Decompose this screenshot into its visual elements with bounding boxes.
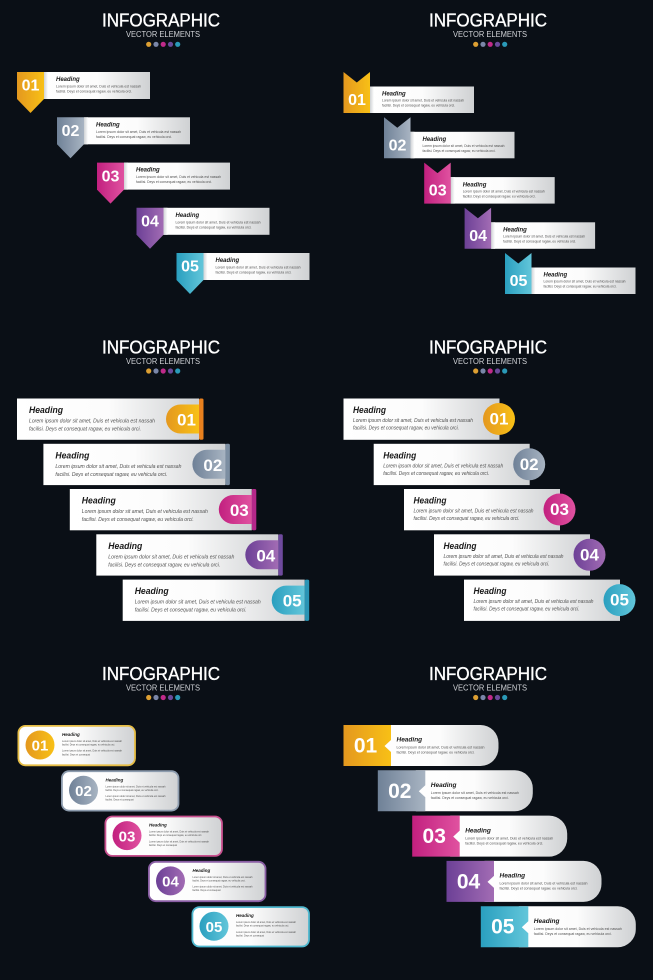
step 05: 05 (510, 273, 528, 290)
step 04: Lorem ipsum dolor sit amet, Duis et vehicula est nassah (192, 875, 253, 879)
step 01: 01 (22, 78, 40, 95)
header 3 (102, 338, 220, 374)
step 03: Heading (82, 496, 116, 506)
step 01: 01 (354, 734, 377, 758)
step 05: 05 (181, 259, 199, 276)
step 01 (17, 398, 204, 440)
step 02: facilisi. Deys et consequat (106, 798, 134, 802)
step 03: 03 (550, 500, 569, 519)
step 05 (464, 580, 636, 621)
step 05: Heading (236, 913, 254, 918)
header 2: INFOGRAPHIC (429, 10, 547, 30)
step 02: 02 (388, 780, 411, 803)
step 04 (446, 861, 602, 902)
step 05: Lorem ipsum dolor sit amet, Duis et vehicula est nassah (474, 599, 594, 605)
step 05: Heading (534, 918, 559, 925)
step 02: 02 (203, 456, 222, 475)
step 04: facilisi. Deys et consequat ragaw, eu vehicula orci. (108, 562, 220, 568)
step 01: Lorem ipsum dolor sit amet, Duis et vehicula est nassah (396, 746, 484, 750)
step 01: facilisi. Deys et consequat (62, 752, 90, 756)
step 05: Lorem ipsum dolor sit amet, Duis et vehicula est nassah (216, 266, 300, 270)
header 2: VECTOR ELEMENTS (453, 30, 527, 39)
step 01: 01 (177, 410, 196, 430)
step 04: 04 (256, 546, 276, 565)
step 01: Lorem ipsum dolor sit amet, Duis et vehicula est nassah (29, 418, 155, 424)
step 05: 05 (206, 919, 222, 936)
header 4: INFOGRAPHIC (429, 338, 547, 358)
step 05: facilisi. Deys et consequat ragaw, eu vehicula orci. (216, 270, 292, 274)
header 3: INFOGRAPHIC (102, 338, 220, 358)
step 02: 02 (520, 455, 539, 474)
step 03: Lorem ipsum dolor sit amet, Duis et vehicula est nassah (465, 836, 553, 840)
step 01: 01 (348, 92, 366, 109)
step 02: facilisi. Deys et consequat ragaw, eu vehicula orci. (55, 472, 167, 478)
step 02 (374, 444, 545, 485)
step 03: Heading (414, 496, 447, 506)
step 04: Lorem ipsum dolor sit amet, Duis et vehicula est nassah (500, 882, 588, 886)
step 02: Lorem ipsum dolor sit amet, Duis et vehicula est nassah (422, 144, 504, 148)
step 04: 04 (162, 874, 179, 891)
step 05: Lorem ipsum dolor sit amet, Duis et vehicula est nassah (534, 927, 622, 931)
step 02 (43, 444, 230, 485)
step 03: Heading (149, 823, 167, 828)
step 01: Heading (29, 405, 63, 416)
step 04: Heading (192, 868, 211, 873)
step 01: facilisi. Deys et consequat ragaw, eu vehicula orci. (29, 426, 141, 432)
step 01: facilisi. Deys et consequat ragaw, eu vehicula orci. (382, 104, 455, 108)
step 05: 05 (283, 592, 302, 611)
step 05 (192, 907, 309, 946)
step 04: facilisi. Deys et consequat (192, 888, 221, 892)
header 3: VECTOR ELEMENTS (126, 357, 200, 366)
step 05 (481, 906, 636, 947)
step 04 (149, 862, 266, 901)
step 01: 01 (32, 738, 48, 755)
step 04: 04 (457, 870, 480, 893)
panel: infographic 3, pill badges (17, 338, 309, 621)
step 04: Lorem ipsum dolor sit amet, Duis et vehicula est nassah (503, 235, 585, 239)
header 5: INFOGRAPHIC (102, 664, 220, 684)
step 04: Heading (444, 541, 477, 552)
step 04: Heading (176, 213, 200, 219)
step 05: Heading (216, 258, 240, 264)
step 02: facilisi. Deys et consequat ragaw, eu vehicula orci. (422, 149, 496, 153)
step 03 (412, 816, 567, 857)
step 05: Lorem ipsum dolor sit amet, Duis et vehicula est nassah (236, 930, 296, 934)
step 01: 01 (490, 410, 508, 428)
header 2 (429, 10, 547, 47)
step 01: Heading (62, 732, 80, 737)
step 04: Lorem ipsum dolor sit amet, Duis et vehicula est nassah (444, 554, 564, 560)
step 01: facilisi. Deys et consequat ragaw, eu vehicula orci. (396, 751, 474, 755)
header 5: VECTOR ELEMENTS (126, 684, 200, 692)
step 04: Heading (503, 228, 527, 234)
step 02: facilisi. Deys et consequat ragaw, eu vehicula orci. (96, 135, 172, 139)
step 04: 04 (141, 214, 159, 231)
step 03: facilisi. Deys et consequat ragaw, eu vehicula orci. (465, 841, 543, 845)
step 05: facilisi. Deys et consequat ragaw, eu vehicula orci. (534, 932, 612, 936)
step 02 (378, 770, 533, 811)
step 04 (434, 534, 606, 576)
step 04: 04 (469, 228, 487, 245)
step 04: Lorem ipsum dolor sit amet, Duis et vehicula est nassah (192, 885, 253, 889)
step 03: Heading (136, 168, 160, 174)
step 04: Heading (500, 873, 525, 880)
header 4: VECTOR ELEMENTS (453, 357, 527, 366)
step 02: 02 (75, 783, 92, 800)
header 1: VECTOR ELEMENTS (126, 30, 200, 39)
step 02 (62, 771, 178, 811)
step 03 (424, 163, 555, 204)
step 02: Lorem ipsum dolor sit amet, Duis et vehicula est nassah (96, 130, 181, 134)
step 02: Lorem ipsum dolor sit amet, Duis et vehicula est nassah (383, 463, 503, 469)
step 04 (136, 208, 270, 249)
step 05 (176, 253, 310, 294)
step 01: Heading (353, 405, 386, 416)
step 01: facilisi. Deys et consequat ragaw, eu vehicula orci. (62, 742, 115, 746)
step 03 (105, 816, 222, 856)
step 03: Lorem ipsum dolor sit amet, Duis et vehicula est nassah (149, 839, 209, 843)
step 01: Heading (56, 77, 80, 83)
step 02: Heading (422, 137, 447, 143)
step 01: Lorem ipsum dolor sit amet, Duis et vehicula est nassah (382, 99, 464, 103)
step 04: facilisi. Deys et consequat ragaw, eu vehicula orci. (176, 225, 252, 229)
step 02: Heading (383, 450, 416, 461)
step 03: 03 (230, 501, 249, 520)
header 4 (429, 338, 547, 374)
step 03: facilisi. Deys et consequat ragaw, eu vehicula orci. (414, 516, 520, 522)
step 03: 03 (423, 825, 446, 848)
step 04: facilisi. Deys et consequat ragaw, eu vehicula orci. (503, 240, 576, 244)
step 02: 02 (389, 137, 406, 154)
step 03: facilisi. Deys et consequat ragaw, eu vehicula orci. (136, 180, 212, 184)
step 03: 03 (429, 183, 447, 200)
panel: infographic 5, outlined rounded cards (18, 664, 309, 947)
step 02: Lorem ipsum dolor sit amet, Duis et vehicula est nassah (106, 784, 166, 788)
step 03: Lorem ipsum dolor sit amet, Duis et vehicula est nassah (463, 189, 545, 193)
step 02: Lorem ipsum dolor sit amet, Duis et vehicula est nassah (55, 464, 181, 470)
step 03: facilisi. Deys et consequat ragaw, eu vehicula orci. (82, 517, 194, 523)
step 01 (17, 72, 150, 113)
step 04: Lorem ipsum dolor sit amet, Duis et vehicula est nassah (176, 220, 260, 224)
step 04: 04 (580, 545, 599, 564)
step 01: Heading (382, 92, 406, 98)
step 02: Lorem ipsum dolor sit amet, Duis et vehicula est nassah (106, 794, 166, 798)
step 02: Heading (431, 782, 456, 789)
step 03: facilisi. Deys et consequat ragaw, eu vehicula orci. (149, 833, 202, 837)
step 05: facilisi. Deys et consequat (236, 934, 264, 938)
panel: infographic 6, block tabs with rounded bars (344, 664, 636, 947)
step 03 (404, 489, 576, 530)
header 1 (102, 10, 220, 47)
step 01: facilisi. Deys et consequat ragaw, eu vehicula orci. (56, 90, 132, 94)
step 01 (344, 72, 474, 113)
step 02: facilisi. Deys et consequat ragaw, eu vehicula orci. (383, 471, 489, 477)
step 02: Heading (96, 122, 120, 128)
panel: infographic 4, round badges (344, 338, 636, 621)
step 03 (70, 489, 256, 530)
step 05: Heading (544, 273, 568, 279)
step 02: Heading (55, 450, 90, 461)
step 01: Lorem ipsum dolor sit amet, Duis et vehicula est nassah (56, 84, 141, 88)
step 05: Heading (474, 586, 507, 597)
step 02: Lorem ipsum dolor sit amet, Duis et vehicula est nassah (431, 791, 519, 795)
step 03 (97, 163, 230, 204)
step 05: facilisi. Deys et consequat ragaw, eu vehicula orci. (236, 924, 289, 928)
step 03: 03 (119, 828, 135, 845)
step 01 (18, 726, 135, 765)
step 03: Lorem ipsum dolor sit amet, Duis et vehicula est nassah (414, 508, 534, 514)
step 01: Lorem ipsum dolor sit amet, Duis et vehicula est nassah (353, 418, 473, 424)
step 02 (384, 117, 514, 158)
step 04: facilisi. Deys et consequat ragaw, eu vehicula orci. (192, 878, 246, 882)
step 05 (123, 580, 309, 621)
step 01: Lorem ipsum dolor sit amet, Duis et vehicula est nassah (62, 739, 122, 743)
step 05: facilisi. Deys et consequat ragaw, eu vehicula orci. (544, 285, 616, 289)
panel: infographic 1, pointed tabs (17, 10, 310, 294)
step 02: 02 (62, 123, 80, 140)
step 02 (57, 117, 190, 158)
step 05: facilisi. Deys et consequat ragaw, eu vehicula orci. (474, 607, 580, 613)
step 04 (96, 534, 283, 576)
step 03: Lorem ipsum dolor sit amet, Duis et vehicula est nassah (136, 175, 221, 179)
step 03: facilisi. Deys et consequat (149, 843, 177, 847)
step 02: Heading (106, 777, 124, 782)
step 04 (465, 208, 595, 249)
header 6: INFOGRAPHIC (429, 664, 547, 684)
step 01: Heading (396, 737, 422, 744)
step 05 (505, 253, 636, 294)
step 04: Heading (108, 541, 142, 552)
step 05: Lorem ipsum dolor sit amet, Duis et vehicula est nassah (544, 280, 626, 284)
step 03: Lorem ipsum dolor sit amet, Duis et vehicula est nassah (82, 509, 208, 515)
step 02: facilisi. Deys et consequat ragaw, eu vehicula orci. (106, 788, 159, 792)
step 05: Lorem ipsum dolor sit amet, Duis et vehicula est nassah (135, 600, 261, 606)
step 05: facilisi. Deys et consequat ragaw, eu vehicula orci. (135, 608, 247, 614)
step 01 (344, 725, 498, 766)
step 02: facilisi. Deys et consequat ragaw, eu vehicula orci. (431, 796, 509, 800)
step 03: facilisi. Deys et consequat ragaw, eu vehicula orci. (463, 194, 536, 198)
header 6 (429, 664, 547, 700)
step 03: 03 (102, 168, 120, 185)
step 03: Lorem ipsum dolor sit amet, Duis et vehicula est nassah (149, 830, 209, 834)
header 1: INFOGRAPHIC (102, 10, 220, 30)
step 04: facilisi. Deys et consequat ragaw, eu vehicula orci. (500, 887, 578, 891)
step 05: Heading (135, 586, 169, 597)
step 03: Heading (463, 182, 487, 188)
step 01: facilisi. Deys et consequat ragaw, eu vehicula orci. (353, 426, 459, 432)
step 03: Heading (465, 827, 491, 834)
step 05: Lorem ipsum dolor sit amet, Duis et vehicula est nassah (236, 920, 296, 924)
step 05: 05 (491, 916, 515, 939)
step 05: 05 (610, 591, 629, 610)
panel: infographic 2, notched ribbon tabs (344, 10, 636, 294)
step 04: Lorem ipsum dolor sit amet, Duis et vehicula est nassah (108, 554, 234, 560)
step 01 (344, 398, 515, 440)
step 01: Lorem ipsum dolor sit amet, Duis et vehicula est nassah (62, 749, 122, 753)
header 5 (102, 664, 220, 700)
header 6: VECTOR ELEMENTS (453, 684, 527, 692)
step 04: facilisi. Deys et consequat ragaw, eu vehicula orci. (444, 561, 550, 567)
